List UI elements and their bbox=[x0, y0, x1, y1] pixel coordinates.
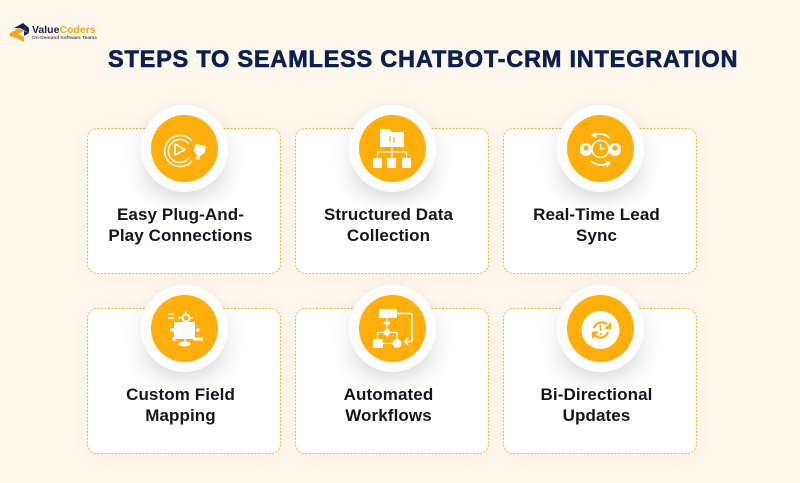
label: Sync bbox=[576, 226, 617, 245]
label: Automated bbox=[344, 385, 433, 404]
title: STEPS TO SEAMLESS CHATBOT-CRM INTEGRATION bbox=[108, 47, 738, 73]
panel: real-time lead sync bbox=[503, 128, 697, 274]
panel: custom field mapping bbox=[87, 308, 281, 454]
label: Play Connections bbox=[108, 226, 253, 245]
label: Structured Data bbox=[324, 205, 453, 224]
label bbox=[108, 205, 253, 245]
icon: automated workflow bbox=[349, 285, 436, 372]
label: Mapping bbox=[145, 406, 216, 425]
icon: structured data hierarchy bbox=[349, 105, 436, 192]
logo tagline: On-Demand Software Teams bbox=[32, 36, 97, 41]
panel: structured data collection bbox=[295, 128, 489, 274]
label: Updates bbox=[563, 406, 630, 425]
logo: ValueCoders bbox=[10, 23, 97, 42]
icon: field mapping bbox=[141, 285, 228, 372]
label: Custom Field bbox=[126, 385, 235, 404]
label: Collection bbox=[347, 226, 430, 245]
label: Bi-Directional bbox=[541, 385, 652, 404]
label bbox=[533, 205, 660, 245]
label: Workflows bbox=[345, 406, 432, 425]
logo wordmark: ValueCoders bbox=[32, 24, 96, 36]
label bbox=[344, 385, 433, 425]
panel: bi-directional updates bbox=[503, 308, 697, 454]
panel: automated workflows bbox=[295, 308, 489, 454]
panel: easy plug-and-play connections bbox=[87, 128, 281, 274]
label bbox=[324, 205, 454, 245]
label bbox=[541, 385, 652, 425]
label: Real-Time Lead bbox=[533, 205, 660, 224]
label bbox=[126, 385, 235, 425]
icon: real-time sync bbox=[557, 105, 644, 192]
label: Easy Plug-And- bbox=[117, 205, 244, 224]
logo icon bbox=[10, 23, 29, 42]
icon: plug and play bbox=[141, 105, 228, 192]
icon: bi-directional sync bbox=[557, 285, 644, 372]
